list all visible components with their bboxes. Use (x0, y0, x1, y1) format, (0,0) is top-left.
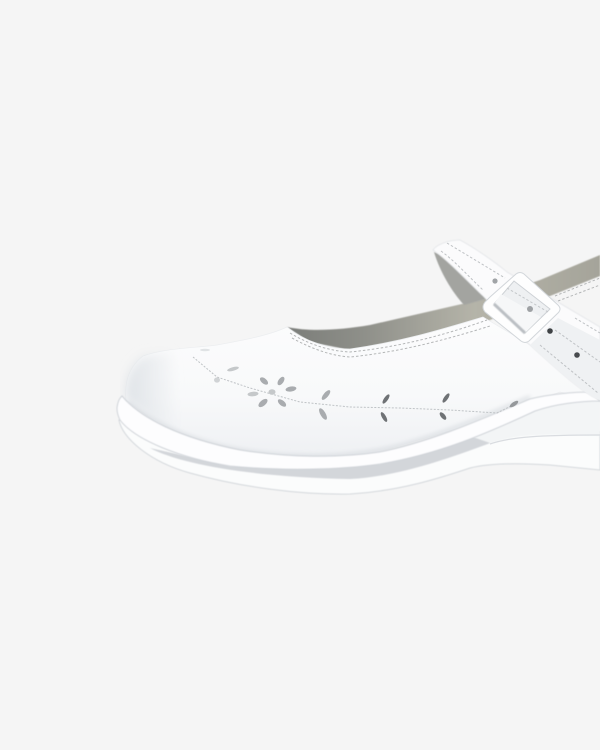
outsole (119, 420, 600, 494)
topline stitching (290, 278, 600, 357)
buckle (483, 272, 560, 342)
perforation flower and leaves (200, 349, 332, 421)
wedge (465, 393, 600, 452)
strap inner lining (434, 252, 490, 305)
shoe (117, 240, 600, 494)
outsole upper edge highlight (490, 435, 600, 444)
upper (126, 317, 600, 460)
strap holes (492, 278, 498, 284)
strap stitching (441, 243, 600, 393)
vamp stitching (193, 357, 517, 413)
ankle strap (433, 240, 600, 400)
toe shading (126, 352, 180, 436)
groove (150, 436, 490, 479)
welt shadow (128, 397, 530, 456)
welt (117, 392, 600, 469)
inner lining (287, 255, 600, 350)
